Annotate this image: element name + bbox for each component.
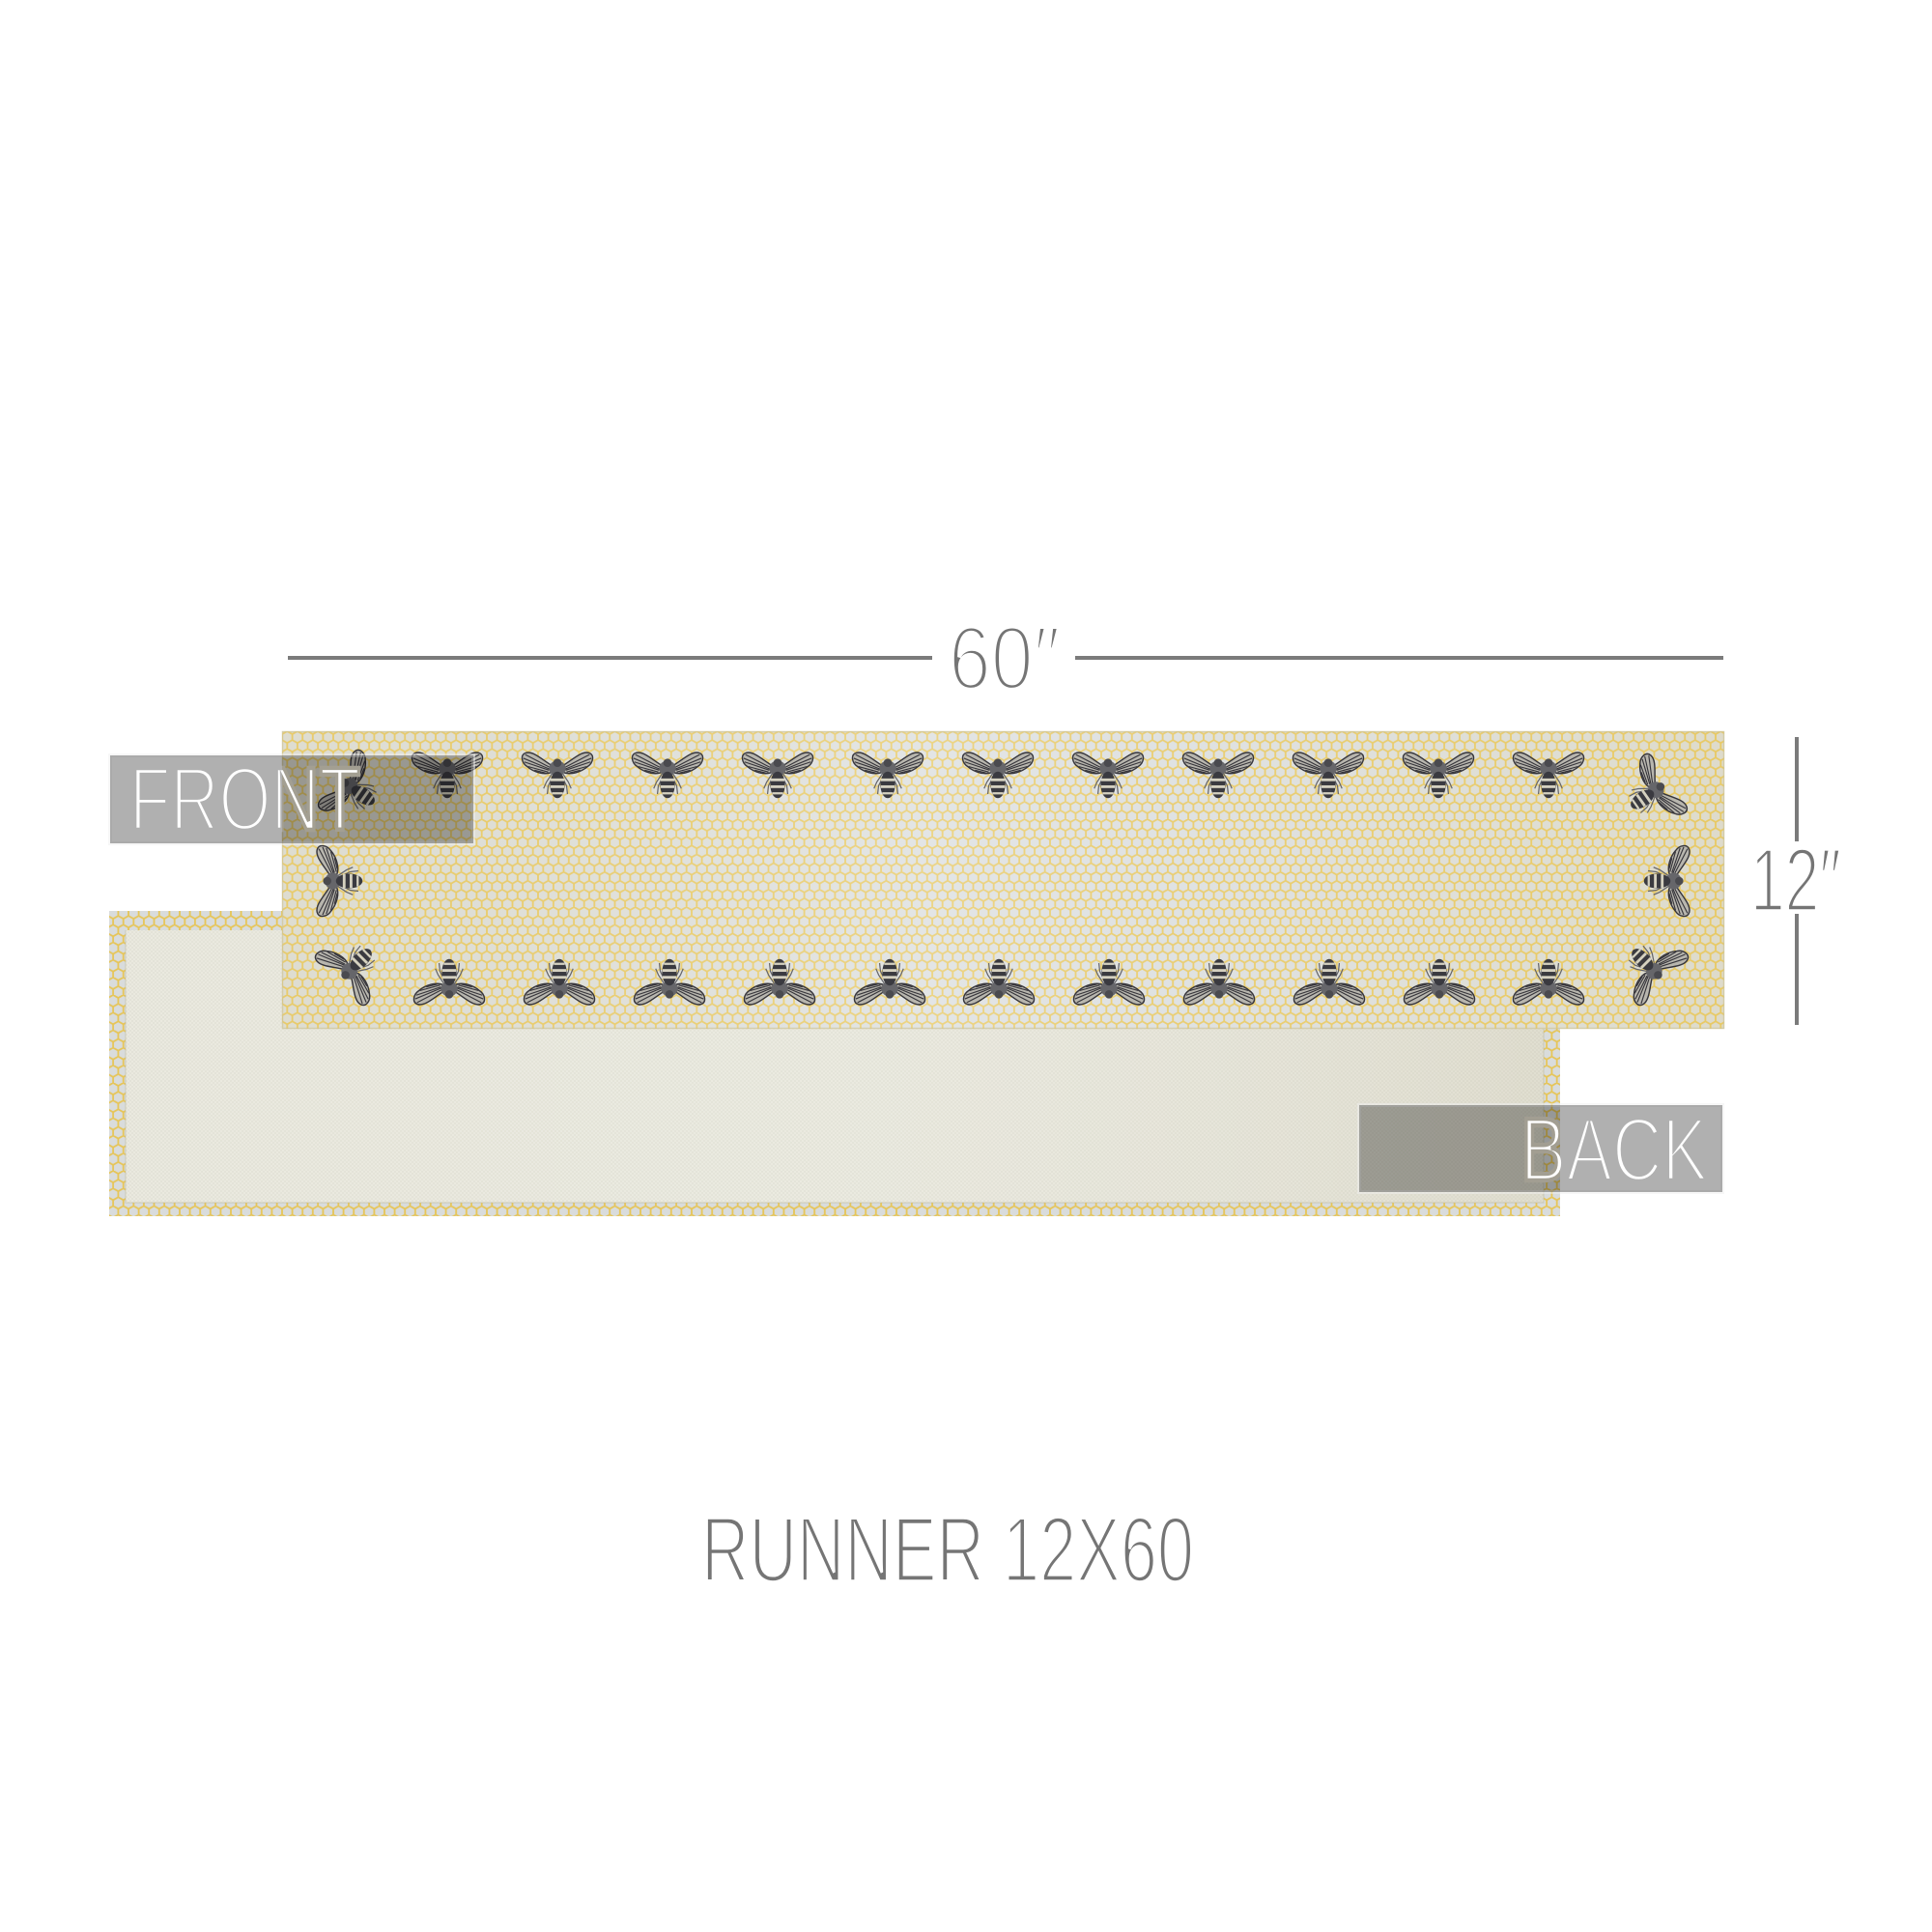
bottom row of bees: [313, 925, 1690, 1008]
panel: front of runner: [282, 731, 1724, 1029]
label: BACK: [1359, 1099, 1722, 1200]
dimension: 12 inch height: 12″: [1750, 830, 1841, 930]
dimension: 60 inch width: [288, 608, 1723, 708]
dimension: 12 inch height: [1750, 737, 1841, 1025]
dimension: 60 inch width: 60″: [949, 608, 1061, 708]
label: BACK: BACK: [1520, 1099, 1708, 1200]
side bees: [317, 845, 1690, 917]
front honeycomb fabric: [282, 731, 1724, 1029]
panel: back of runner: [109, 911, 1560, 1216]
label: FRONT: FRONT: [129, 749, 360, 849]
back hem with honeycomb border: [109, 911, 1560, 1216]
top row of bees: [316, 748, 1690, 836]
back woven fabric: [126, 930, 1544, 1203]
caption: product name: RUNNER 12X60: [701, 1498, 1194, 1602]
